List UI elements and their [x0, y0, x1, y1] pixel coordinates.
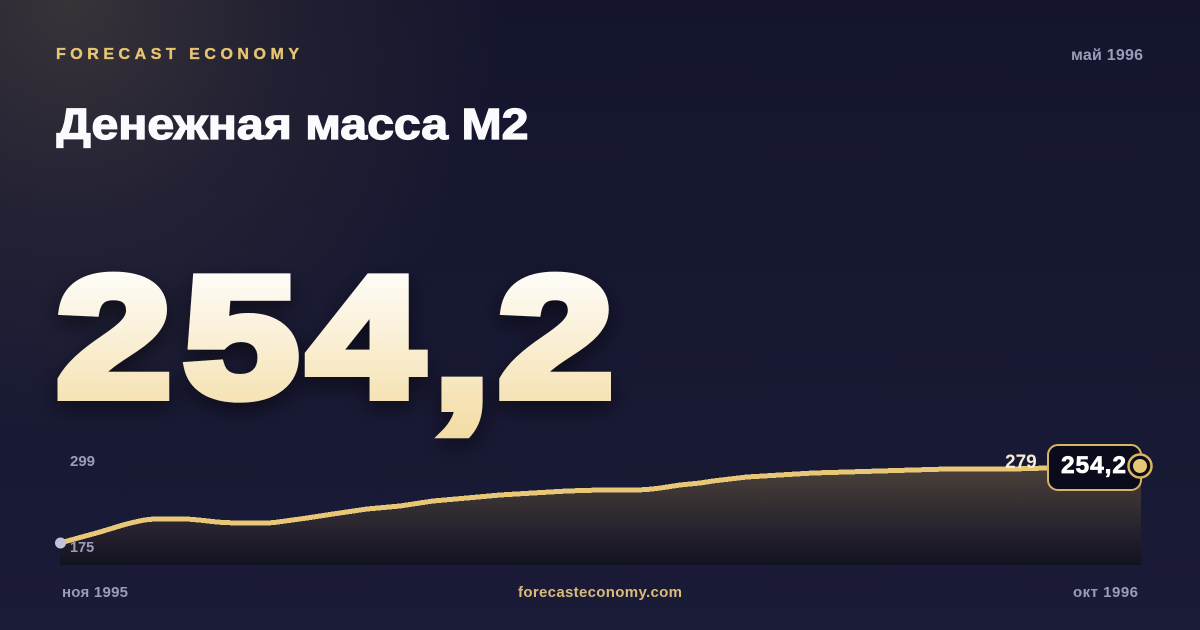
current value badge: 254,2 — [1061, 452, 1126, 479]
start date: ноя 1995 — [62, 584, 128, 601]
title: Денежная масса M2 — [56, 100, 528, 149]
chart line — [60, 467, 1141, 543]
brand label: FORECAST ECONOMY — [56, 46, 299, 63]
website: forecasteconomy.com — [518, 584, 682, 601]
big value: 254 — [56, 242, 423, 433]
start point — [55, 538, 66, 548]
area chart — [55, 467, 1141, 565]
current value badge — [1048, 445, 1141, 490]
axis min label: 175 — [70, 540, 94, 556]
previous value label: 279 — [1005, 452, 1037, 473]
axis max label: 299 — [70, 453, 95, 470]
big value: 2 — [498, 242, 613, 433]
big value: , — [433, 253, 490, 443]
end date: окт 1996 — [1073, 584, 1138, 601]
end point marker — [1128, 454, 1152, 478]
date top right: май 1996 — [1071, 47, 1143, 64]
chart area fill — [60, 467, 1141, 565]
